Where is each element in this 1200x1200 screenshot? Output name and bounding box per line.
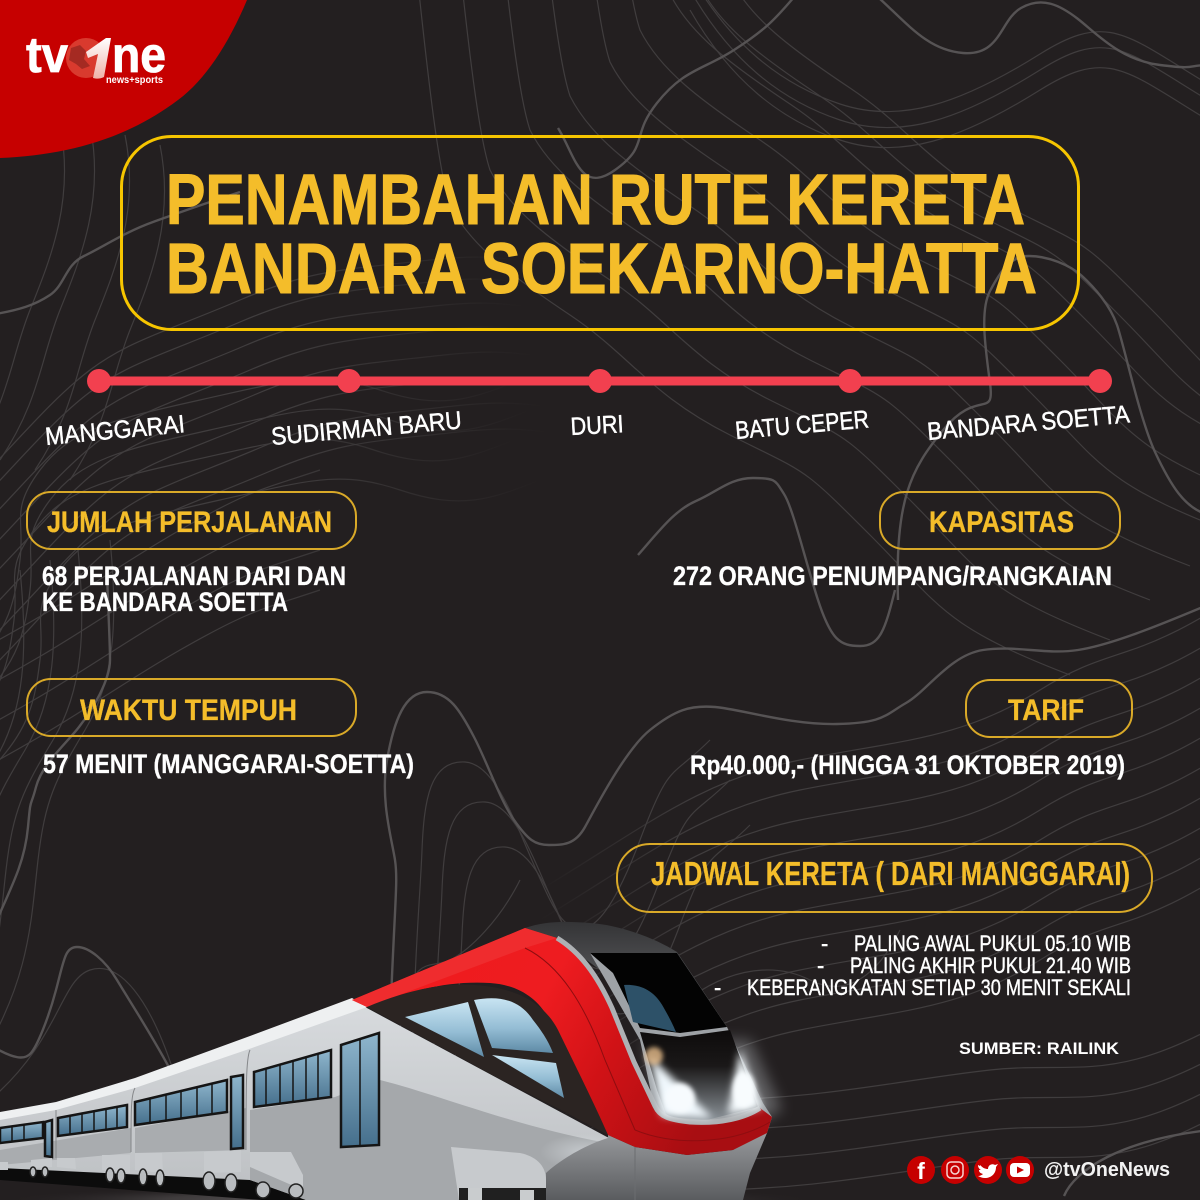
headlights [650,1050,762,1118]
panel: jumlah perjalanan: 68 PERJALANAN DARI DAN [42,561,346,591]
title [166,161,1037,309]
headlight halo [645,1040,782,1128]
panel: jumlah perjalanan: JUMLAH PERJALANAN [47,506,332,539]
social icons [907,1156,1034,1184]
carriage joints [56,1050,250,1158]
social icons: f [917,1158,925,1184]
station labels: MANGGARAI [44,410,186,451]
panel: jadwal kereta: PALING AKHIR PUKUL 21.40 WIB [850,953,1131,978]
title box [122,136,1078,330]
station labels [44,400,1131,451]
panel: jadwal kereta: KEBERANGKATAN SETIAP 30 MENIT SEKALI [747,975,1131,1000]
panel: jumlah perjalanan: KE BANDARA SOETTA [42,587,288,617]
face [590,953,772,1135]
grey lower side [250,1080,635,1200]
face panel [640,1030,758,1120]
logo corner [0,0,247,158]
nose lower [546,1117,772,1200]
undercarriage [0,1165,312,1200]
station labels: BANDARA SOETTA [926,400,1131,446]
white roof band [0,998,367,1120]
panel: kapasitas: KAPASITAS [929,506,1074,539]
window mullions [12,1039,360,1146]
wheels [30,1167,303,1198]
panel: kapasitas: 272 ORANG PENUMPANG/RANGKAIAN [673,561,1112,591]
panel: jadwal kereta [617,844,1152,1000]
windshield [590,953,727,1033]
social handle: @tvOneNews [1044,1159,1170,1181]
side cab windows [405,1002,484,1057]
panel: waktu tempuh [27,679,414,779]
body gloss [540,1134,630,1170]
panel: waktu tempuh: 57 MENIT (MANGGARAI-SOETTA) [43,749,414,779]
title: BANDARA SOEKARNO-HATTA [166,230,1037,309]
side windows [0,1033,379,1157]
silver pinstripe [557,938,760,1122]
nose highlight [352,928,557,1007]
panel: jumlah perjalanan [27,492,356,617]
logo: tvOne: news+sports [106,74,163,86]
panel: jadwal kereta: - [821,931,828,956]
station labels: BATU CEPER [734,405,870,445]
source note: SUMBER: RAILINK [959,1039,1120,1058]
red nose [352,928,772,1155]
route line [87,369,1112,393]
panel: tarif: Rp40.000,- (HINGGA 31 OKTOBER 2019) [690,750,1125,780]
panel: tarif [690,680,1132,780]
panel: jadwal kereta: - [817,953,824,978]
carriage body [0,1000,635,1200]
window surround [367,985,608,1135]
station labels: DURI [570,410,624,441]
title: PENAMBAHAN RUTE KERETA [166,161,1025,240]
logo: tvOne: ne [112,27,166,83]
panel: jadwal kereta: - [714,975,721,1000]
floor glow [0,1170,820,1200]
station labels: SUDIRMAN BARU [270,406,463,451]
front wheel recess [459,1188,546,1200]
panel: kapasitas [673,492,1120,591]
panel: tarif: TARIF [1008,694,1084,727]
panel: jadwal kereta: PALING AWAL PUKUL 05.10 WIB [854,931,1131,956]
roof cap [525,922,727,1027]
logo: tvOne [26,27,166,86]
skirts [0,1147,546,1200]
logo: tvOne: tv [26,27,68,83]
train illustration [0,922,786,1200]
panel: waktu tempuh: WAKTU TEMPUH [80,694,297,727]
